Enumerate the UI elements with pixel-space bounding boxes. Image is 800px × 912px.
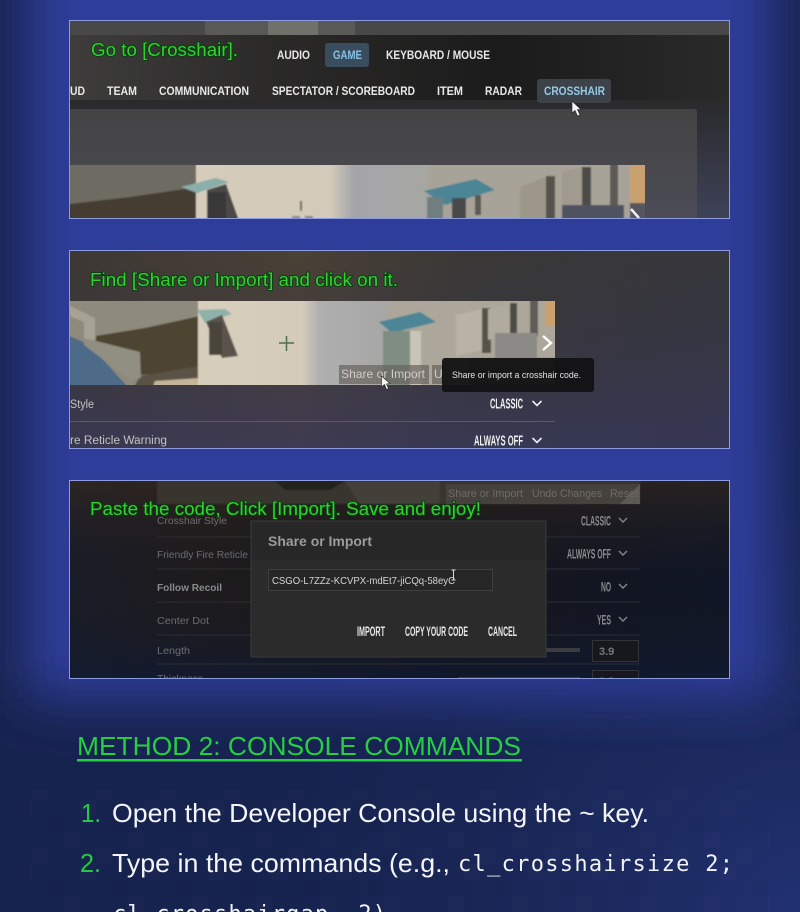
settings labels: Crosshair Style — [157, 515, 227, 527]
settings labels: Friendly Fire Reticle — [157, 549, 248, 561]
sub menu: COMMUNICATION — [159, 84, 249, 98]
sub menu: SPECTATOR / SCOREBOARD — [272, 84, 415, 98]
heading: method 2: METHOD 2: CONSOLE COMMANDS — [77, 731, 521, 761]
icon: mouse cursor — [572, 101, 581, 116]
dialog — [251, 521, 546, 657]
settings labels — [157, 515, 248, 685]
faded photo strip — [157, 481, 640, 504]
share button: Share or Import — [341, 367, 426, 381]
settings labels: Follow Recoil — [157, 582, 222, 594]
setting row: reticle warning: ALWAYS OFF — [474, 434, 523, 450]
tooltip — [442, 358, 594, 392]
dialog: COPY YOUR CODE — [405, 624, 468, 639]
sub menu: UD — [70, 84, 85, 98]
step caption: Paste the code, Click [Import]. Save and enjoy! — [90, 499, 481, 519]
list item 2: cl_crosshairsize 2; — [458, 852, 733, 877]
list item 2: Type in the commands (e.g., — [112, 848, 450, 878]
faded action buttons — [446, 484, 640, 504]
sub menu: TEAM — [107, 84, 137, 98]
icon: crosshair — [279, 336, 294, 351]
share button: U — [434, 367, 443, 381]
dialog: Share or Import — [268, 533, 372, 549]
panel: share or import — [60, 250, 730, 450]
panel: go to crosshair — [60, 20, 730, 229]
setting row: style: CLASSIC — [490, 396, 523, 412]
list item 1: 1. — [81, 798, 101, 828]
sliders — [458, 640, 639, 678]
settings labels: Thickness — [157, 673, 203, 685]
step caption: Go to [Crosshair]. — [91, 40, 238, 60]
icon: mouse cursor — [382, 376, 390, 390]
dialog: CSGO-L7ZZz-KCVPX-mdEt7-jiCQq-58eyC — [272, 575, 455, 587]
list item 2: 2. — [80, 848, 101, 878]
share button — [339, 365, 444, 384]
faded action buttons: Undo Changes — [532, 488, 602, 500]
top menu: GAME — [333, 48, 362, 62]
dialog: CANCEL — [488, 624, 517, 639]
settings values: NO — [601, 580, 611, 594]
list item 1: Open the Developer Console using the ~ key. — [112, 798, 649, 828]
settings values: CLASSIC — [581, 514, 611, 528]
sub menu — [70, 86, 605, 95]
step caption: Find [Share or Import] and click on it. — [90, 270, 398, 290]
panel: paste the code — [70, 480, 730, 692]
faded action buttons: Share or Import — [448, 488, 523, 500]
list item 2 — [80, 848, 733, 912]
photo: building wall — [70, 165, 645, 218]
sliders: 3.9 — [599, 646, 614, 658]
settings values — [567, 514, 627, 628]
faded action buttons: Reset — [610, 488, 638, 500]
sliders: 0.8 — [599, 676, 614, 688]
settings values: ALWAYS OFF — [567, 546, 611, 562]
settings values: YES — [597, 612, 611, 628]
settings labels: Center Dot — [157, 615, 209, 627]
tooltip: Share or import a crosshair code. — [452, 370, 581, 381]
dialog: IMPORT — [357, 624, 385, 639]
top menu: AUDIO — [277, 48, 310, 62]
setting row: reticle warning: re Reticle Warning — [70, 435, 167, 447]
sub menu: CROSSHAIR — [544, 84, 605, 98]
settings labels: Length — [157, 645, 190, 657]
setting row: reticle warning — [70, 435, 542, 446]
top menu: KEYBOARD / MOUSE — [386, 48, 490, 62]
photo: crosshair preview — [70, 301, 555, 385]
setting row: style — [70, 398, 542, 410]
top menu — [277, 50, 490, 59]
setting row: style: Style — [70, 399, 94, 411]
sub menu: ITEM — [437, 84, 463, 98]
sub menu: RADAR — [485, 84, 522, 98]
